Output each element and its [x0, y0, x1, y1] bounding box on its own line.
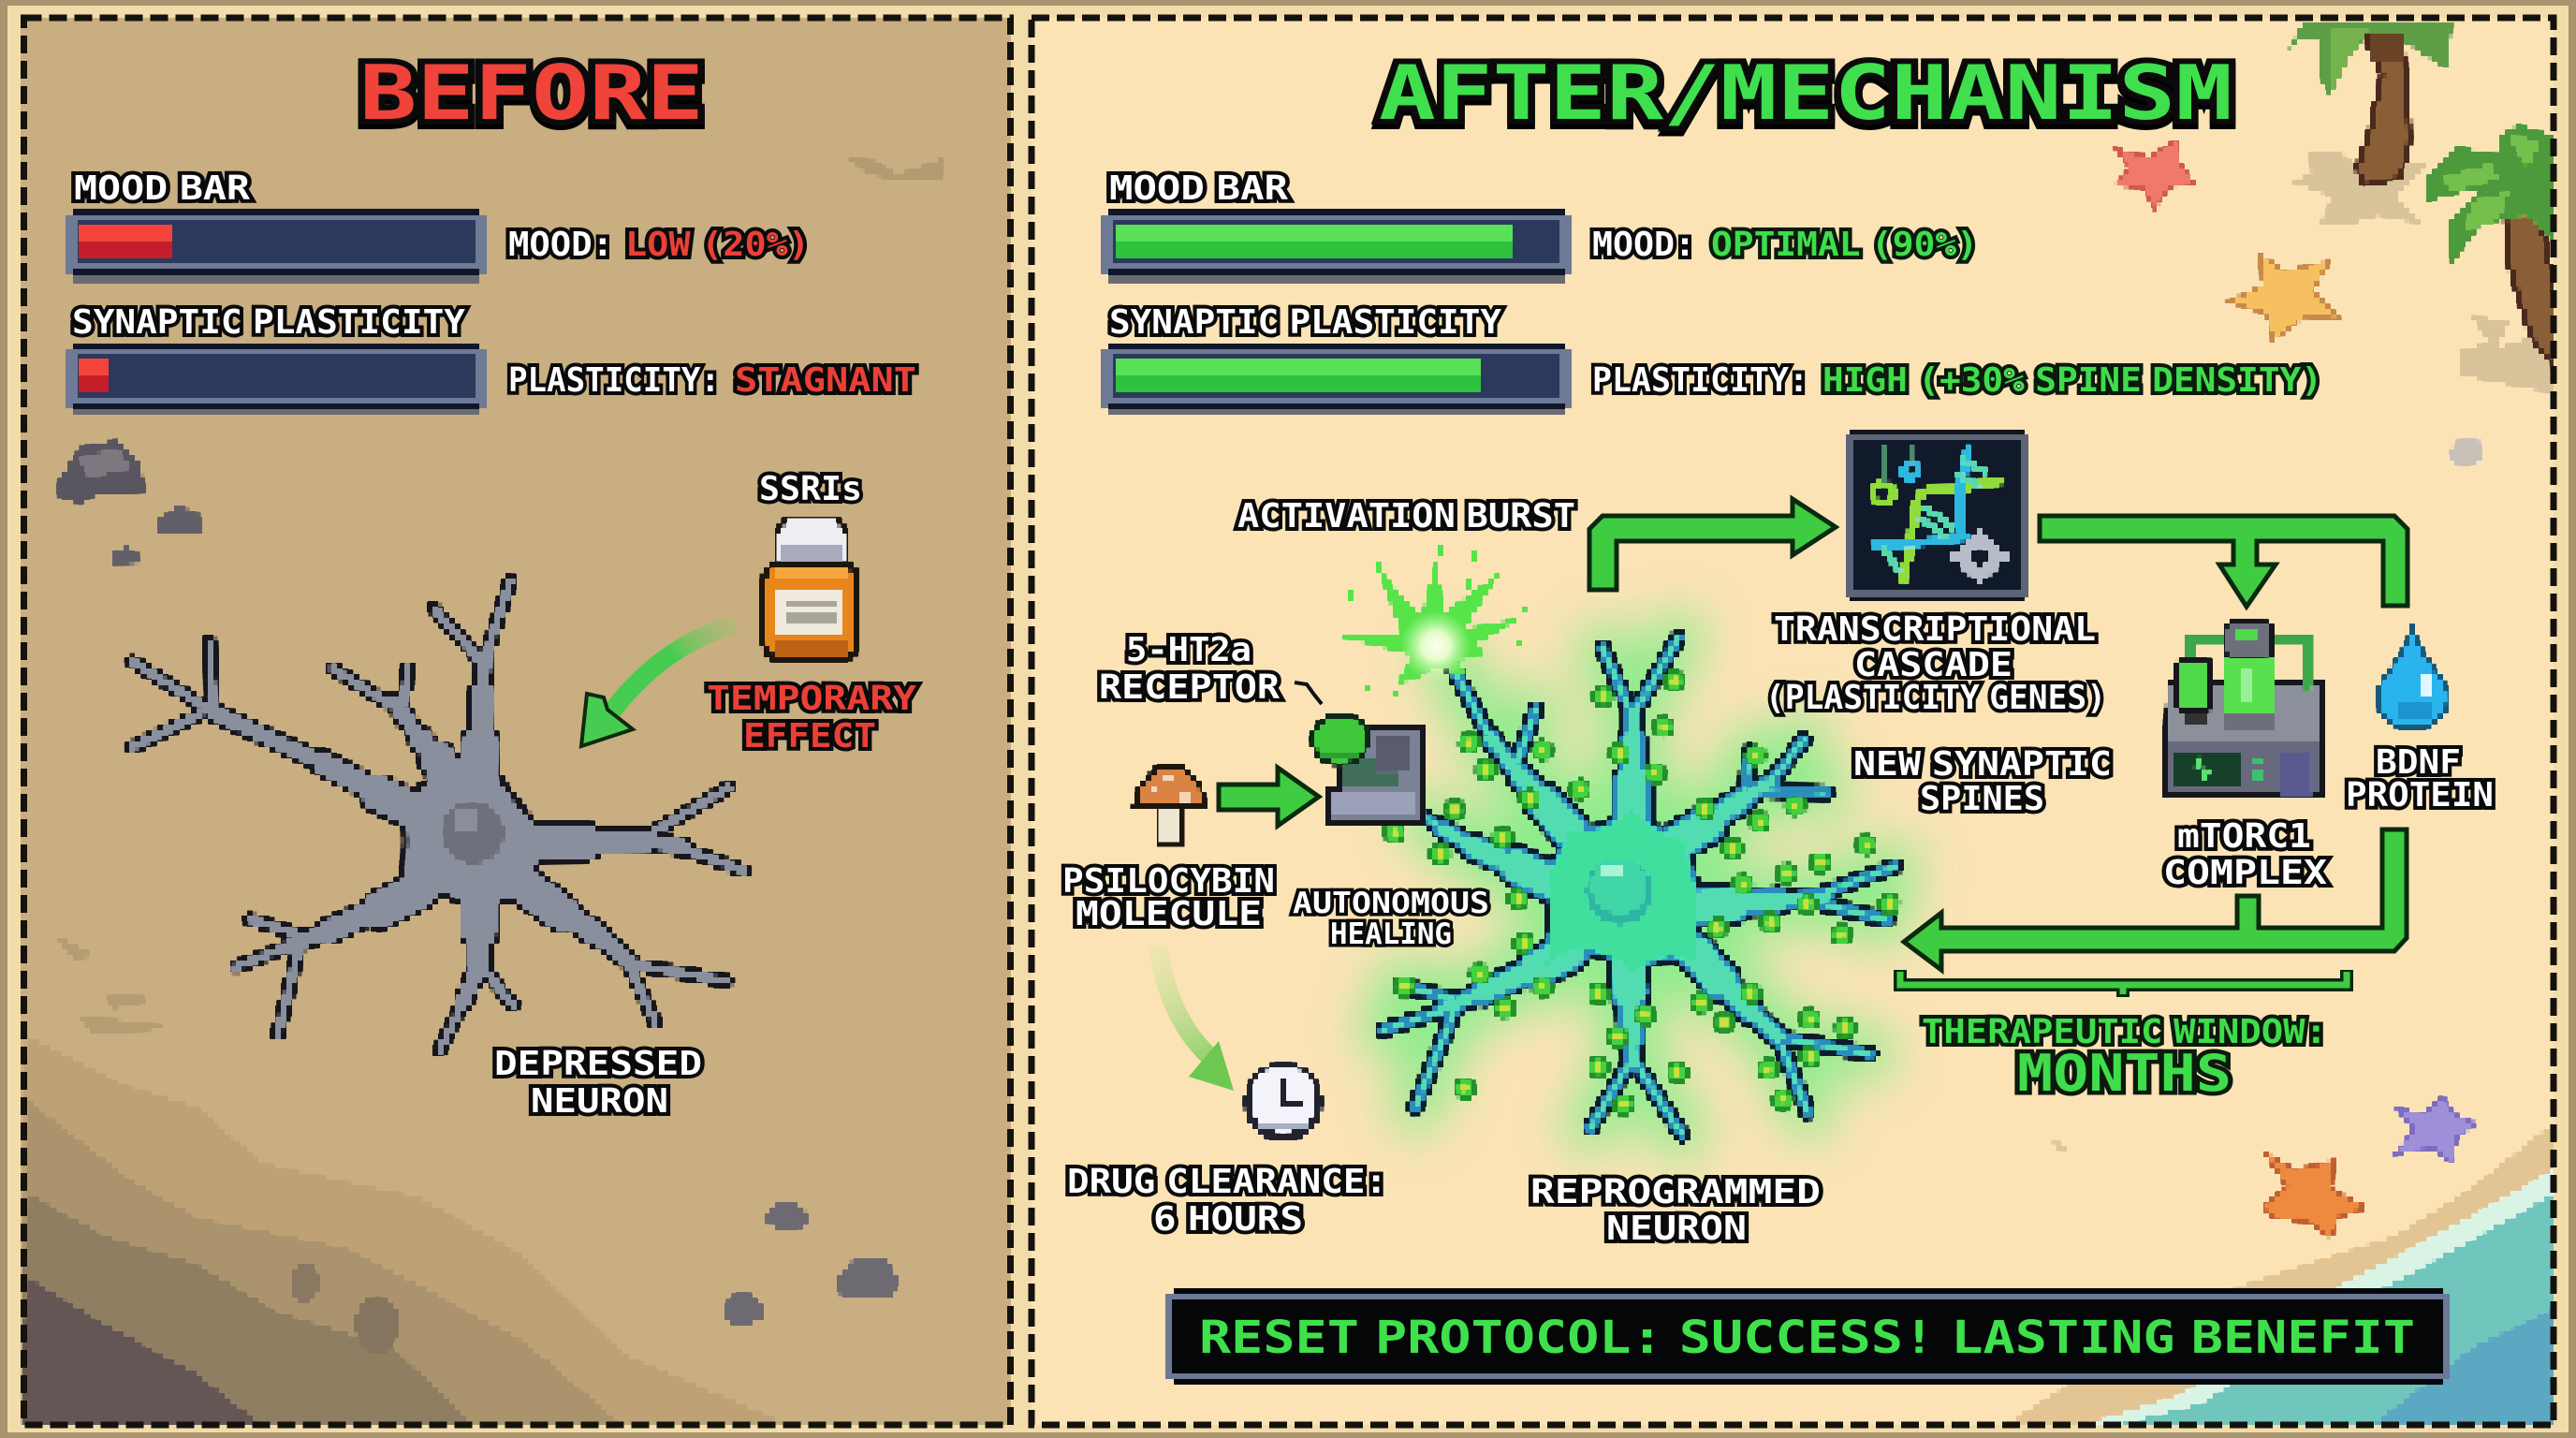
status: plasticity high — [1592, 361, 2322, 400]
label: transcriptional cascade — [1765, 610, 2106, 717]
status: mood optimal: MOOD: — [1592, 226, 1695, 264]
panel: before — [21, 18, 1011, 1425]
icon: receptor — [1310, 712, 1421, 822]
arrow: drug clearance fade — [1158, 946, 1234, 1091]
label: autonomous healing: HEALING — [1330, 917, 1452, 951]
heading: after/mechanism: AFTER/MECHANISM — [1379, 50, 2232, 137]
red plasticity fill — [79, 359, 109, 392]
mood bar low — [66, 209, 487, 284]
palm shadows — [2293, 150, 2432, 225]
label: temporary effect: TEMPORARY — [707, 680, 916, 718]
label: new synaptic spines — [1853, 745, 2112, 818]
label: mood bar: MOOD BAR — [1109, 169, 1288, 208]
label: psilocybin molecule: MOLECULE — [1076, 895, 1262, 933]
status: plasticity high: HIGH (+30% SPINE DENSITY) — [1822, 361, 2322, 400]
label: 5-HT2a receptor: RECEPTOR — [1099, 668, 1280, 707]
label: autonomous healing: AUTONOMOUS — [1293, 887, 1489, 920]
label: temporary effect — [707, 680, 916, 756]
arrow: pathway back to neuron — [1904, 829, 2407, 970]
icon: pill bottle — [761, 518, 860, 663]
beach scenery — [2006, 22, 2560, 1425]
label: mTORC1 complex: COMPLEX — [2163, 854, 2327, 892]
label: new synaptic spines: SPINES — [1920, 780, 2044, 818]
callout line — [1295, 682, 1322, 704]
status: plasticity high: PLASTICITY: — [1592, 361, 1808, 400]
label: synaptic plasticity: SYNAPTIC PLASTICITY — [72, 303, 465, 342]
label: temporary effect: EFFECT — [743, 717, 876, 756]
arrow: cascade to mTORC1 and BDNF — [2040, 516, 2408, 607]
banner text: RESET PROTOCOL: SUCCESS! LASTING BENEFIT — [1199, 1312, 2415, 1364]
nucleus — [1586, 858, 1653, 925]
plasticity bar high — [1101, 344, 1572, 415]
label: BDNF protein — [2346, 743, 2494, 814]
label: transcriptional cascade: CASCADE — [1854, 646, 2012, 684]
label: depressed neuron: NEURON — [531, 1082, 668, 1121]
banner: reset protocol — [1165, 1288, 2450, 1385]
label: BDNF protein: PROTEIN — [2346, 776, 2494, 814]
label: synaptic plasticity: SYNAPTIC PLASTICITY — [1109, 303, 1501, 342]
label: therapeutic window: THERAPEUTIC WINDOW: — [1922, 1013, 2327, 1051]
label: new synaptic spines: NEW SYNAPTIC — [1853, 745, 2112, 784]
label: 5-HT2a receptor: 5-HT2a — [1126, 631, 1251, 669]
nucleus — [441, 800, 505, 864]
status: mood low: MOOD: — [508, 226, 613, 264]
arrow: temporary SSRI effect — [581, 624, 735, 746]
label: depressed neuron: DEPRESSED — [494, 1045, 702, 1083]
icon: psilocybin mushroom — [1134, 766, 1206, 843]
activation burst — [1340, 545, 1526, 698]
label: autonomous healing — [1293, 887, 1489, 951]
label: psilocybin molecule — [1062, 862, 1275, 933]
label: mTORC1 complex — [2163, 817, 2327, 892]
DNA helix — [1873, 447, 2008, 585]
shore — [2006, 1123, 2554, 1425]
icon: transcriptional cascade DNA panel — [1846, 430, 2028, 601]
status: plasticity stagnant — [508, 361, 916, 400]
label: SSRIs: SSRIs — [759, 470, 862, 508]
icon: mTORC1 machine — [2163, 623, 2324, 799]
status: mood low: LOW (20%) — [625, 226, 810, 264]
status: mood low — [508, 226, 810, 264]
mood bar optimal — [1101, 209, 1572, 284]
label: mTORC1 complex: mTORC1 — [2177, 817, 2311, 856]
label: reprogrammed neuron — [1530, 1173, 1821, 1248]
label: 5-HT2a receptor — [1099, 631, 1280, 707]
status: plasticity stagnant: PLASTICITY: — [508, 361, 720, 400]
arrow: burst to cascade — [1589, 499, 1836, 590]
icon: clock — [1244, 1063, 1323, 1141]
bracket: therapeutic window span — [1900, 970, 2347, 997]
reprogrammed neuron — [1383, 638, 1900, 1135]
icon: BDNF drop — [2378, 629, 2448, 728]
rings — [1873, 483, 1894, 504]
plasticity bar stagnant — [66, 344, 487, 415]
label: psilocybin molecule: PSILOCYBIN — [1062, 862, 1275, 901]
label: BDNF protein: BDNF — [2376, 743, 2461, 782]
label: activation burst: ACTIVATION BURST — [1237, 497, 1575, 536]
neuron glow — [1383, 638, 1895, 1135]
arrow: molecule to receptor — [1219, 768, 1319, 826]
label: transcriptional cascade: (PLASTICITY GENES) — [1765, 679, 2106, 717]
green mood fill — [1116, 225, 1513, 258]
gear — [1952, 529, 2008, 585]
label: depressed neuron — [494, 1045, 702, 1121]
sand and rocks background — [21, 156, 945, 1425]
status: mood optimal: OPTIMAL (90%) — [1711, 226, 1978, 264]
starfish — [2115, 140, 2194, 208]
status: mood optimal — [1592, 226, 1978, 264]
label: mood bar: MOOD BAR — [74, 169, 250, 208]
label: transcriptional cascade: TRANSCRIPTIONAL — [1774, 610, 2096, 649]
label: drug clearance — [1067, 1163, 1387, 1239]
status: plasticity stagnant: STAGNANT — [735, 361, 916, 400]
heading: before: BEFORE — [359, 50, 704, 137]
label: drug clearance: 6 HOURS — [1153, 1200, 1303, 1239]
new synaptic spines — [1383, 669, 1900, 1116]
label: months: MONTHS — [2017, 1044, 2232, 1103]
label: reprogrammed neuron: NEURON — [1606, 1210, 1747, 1248]
red mood fill — [79, 225, 172, 258]
depressed neuron — [133, 581, 743, 1049]
label: drug clearance: DRUG CLEARANCE: — [1067, 1163, 1387, 1201]
green plasticity fill — [1116, 359, 1481, 392]
palm trees — [2357, 37, 2409, 185]
label: reprogrammed neuron: REPROGRAMMED — [1530, 1173, 1821, 1211]
panel: after — [1032, 18, 2560, 1425]
